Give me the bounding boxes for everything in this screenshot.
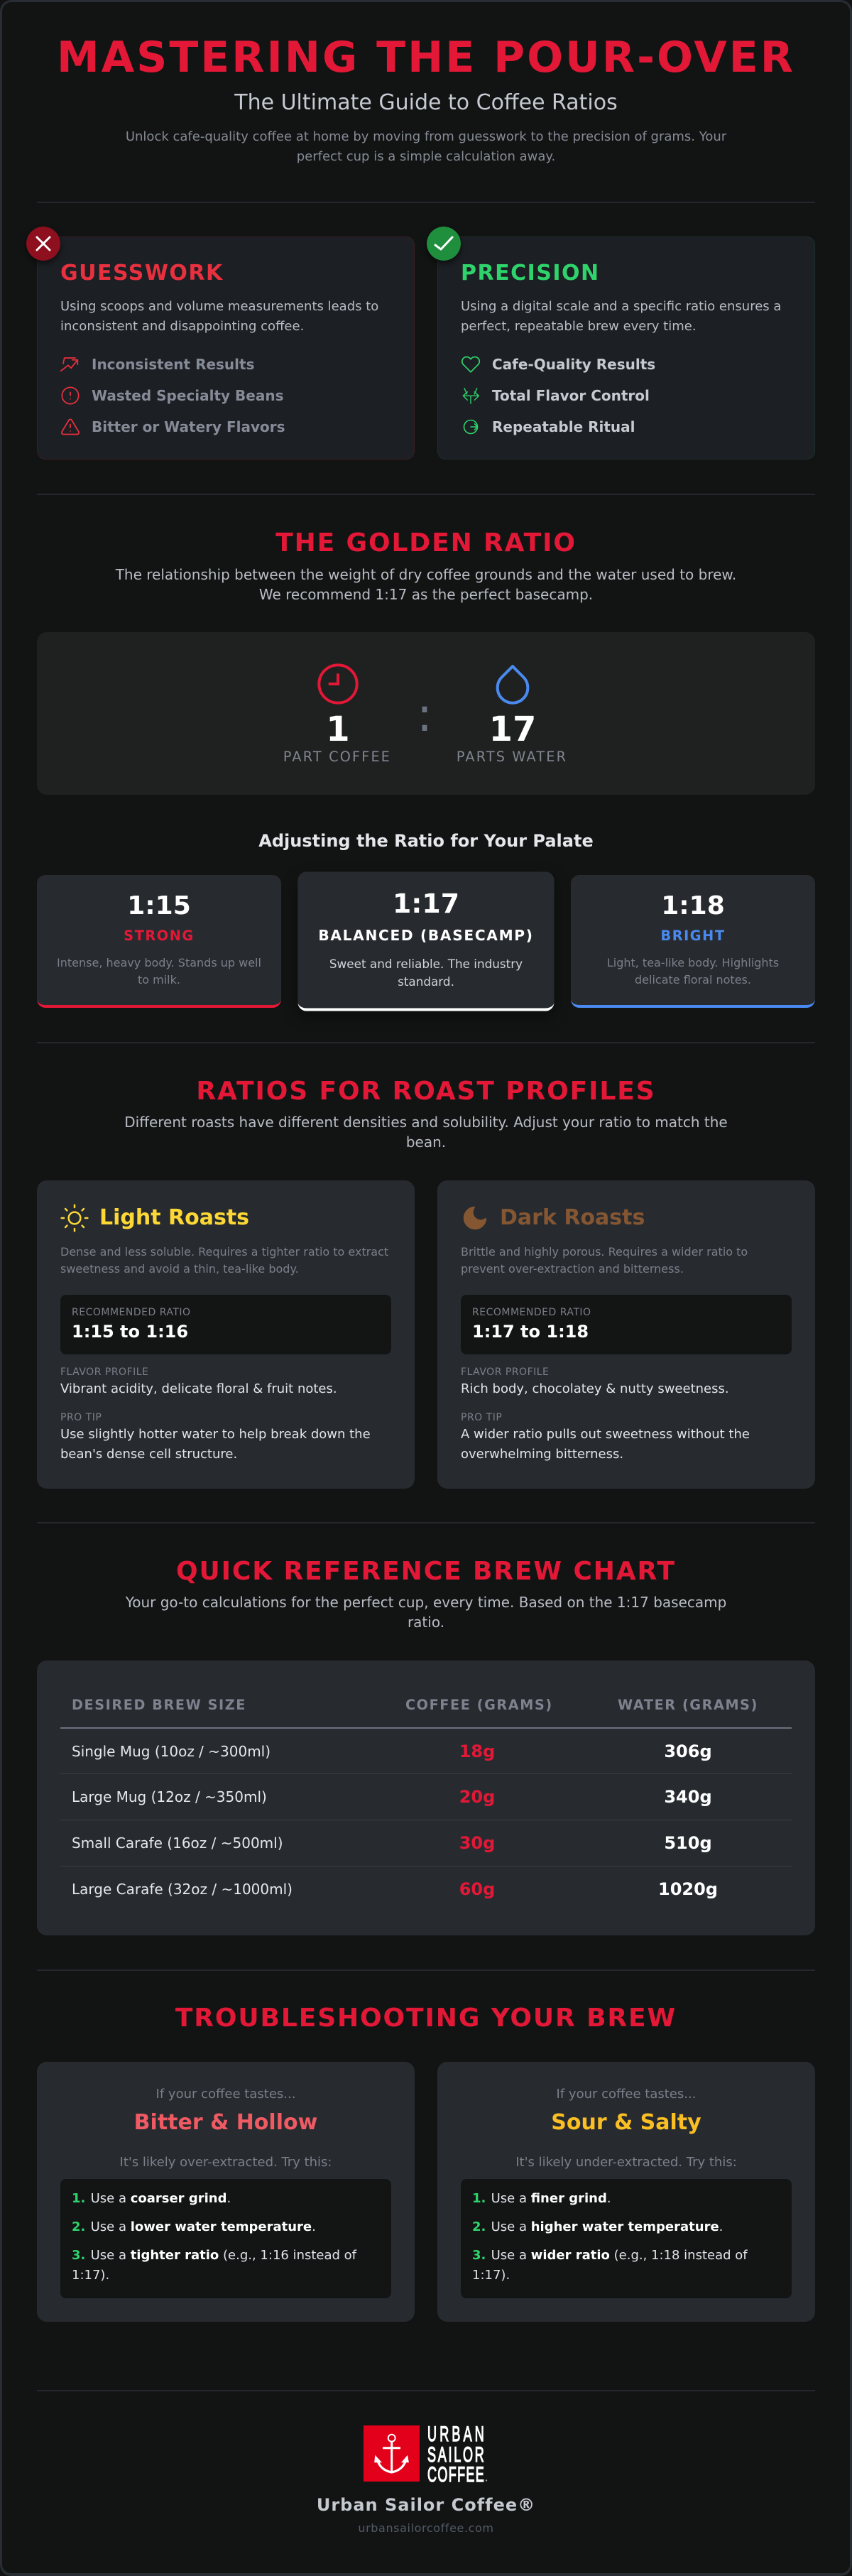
panel: brew table [37, 1661, 815, 1935]
row: large mug: 340g [664, 1787, 712, 1807]
callout: light ratio: RECOMMENDED RATIO [72, 1307, 191, 1318]
heading: precision: PRECISION [461, 261, 600, 286]
text: prompt: If your coffee tastes... [156, 2087, 295, 2102]
callout: dark ratio [461, 1295, 792, 1354]
panel: golden ratio [37, 632, 815, 795]
header [57, 33, 795, 164]
panel: precision [437, 237, 815, 460]
text: golden ratio intro: We recommend 1:17 as the perfect basecamp. [259, 586, 593, 603]
text: brew chart intro [125, 1594, 726, 1631]
list: fixes: 3. Use a tighter ratio (e.g., 1:16 instead of [72, 2248, 356, 2263]
text: brew chart intro: ratio. [408, 1614, 444, 1631]
text: tip [60, 1427, 371, 1462]
text: prompt: If your coffee tastes... [557, 2087, 696, 2102]
text: golden ratio intro [115, 566, 736, 603]
heading: adjusting the ratio: Adjusting the Ratio for Your Palate [258, 831, 594, 851]
text: dark description [461, 1245, 748, 1276]
card: 1:17 balanced: standard. [398, 974, 454, 989]
heading: dark roasts: Dark Roasts [500, 1205, 645, 1230]
heading: guesswork: GUESSWORK [60, 261, 224, 286]
logo: urban sailor coffee: SAILOR [427, 2444, 484, 2467]
text: roast intro: Different roasts have different densities and solubility. Adjust your ratio to match the [124, 1114, 728, 1131]
row: large carafe [72, 1879, 718, 1899]
icon: cross badge [26, 227, 60, 261]
panel: light roasts [37, 1180, 415, 1489]
list: fixes: 2. Use a lower water temperature. [72, 2219, 316, 2234]
row: large carafe: Large Carafe (32oz / ~1000ml) [72, 1881, 293, 1898]
number: water parts: 17 [489, 710, 536, 749]
list: fixes [461, 2179, 792, 2298]
icon: water drop [496, 665, 530, 705]
card: 1:15 strong [37, 875, 281, 1008]
row: single mug: Single Mug (10oz / ~300ml) [72, 1743, 271, 1760]
list: fixes [60, 2179, 391, 2298]
text: dark description: prevent over-extraction and bitterness. [461, 1262, 684, 1276]
table header [60, 1661, 792, 1729]
text: precision description [461, 299, 781, 334]
row: single mug [60, 1729, 792, 1774]
label: pro tip: PRO TIP [60, 1412, 102, 1423]
text: tip: A wider ratio pulls out sweetness without the [461, 1427, 750, 1442]
card: 1:17 balanced: 1:17 [393, 888, 459, 920]
website: urbansailorcoffee.com [358, 2521, 494, 2535]
list: fixes: 1:17). [72, 2268, 109, 2283]
row: small carafe: 510g [664, 1833, 712, 1853]
text: tip: bean's dense cell structure. [60, 1447, 237, 1462]
heading: sour and salty: Sour & Salty [551, 2110, 701, 2135]
intro text: perfect cup is a simple calculation away. [297, 149, 555, 164]
text: diagnosis: It's likely under-extracted. Try this: [515, 2155, 737, 2170]
heading: brew chart: QUICK REFERENCE BREW CHART [176, 1557, 676, 1586]
card: 1:18 bright: 1:18 [661, 891, 725, 920]
table header: COFFEE (GRAMS) [405, 1697, 553, 1713]
text: guesswork description: inconsistent and disappointing coffee. [60, 319, 304, 334]
card: 1:15 strong: to milk. [138, 973, 180, 987]
row: large mug: Large Mug (12oz / ~350ml) [72, 1788, 267, 1805]
callout: light ratio: 1:15 to 1:16 [72, 1322, 188, 1342]
table header: WATER (GRAMS) [618, 1697, 758, 1713]
list: fixes: 1:17). [472, 2268, 510, 2283]
heading: troubleshooting: TROUBLESHOOTING YOUR BREW [175, 2004, 677, 2033]
row: large mug [60, 1774, 792, 1820]
card: 1:15 strong: STRONG [124, 928, 195, 944]
item: bitter or watery: Bitter or Watery Flavors [92, 418, 285, 435]
text: light description: sweetness and avoid a thin, tea-like body. [60, 1262, 299, 1276]
card: 1:15 strong: Intense, heavy body. Stands up well [57, 956, 261, 969]
text: roast intro: bean. [406, 1134, 446, 1151]
panel: dark roasts [437, 1180, 815, 1489]
card: 1:18 bright: Light, tea-like body. Highlights [607, 956, 779, 969]
item: flavor control: Total Flavor Control [492, 387, 650, 404]
heading: bitter and hollow: Bitter & Hollow [134, 2110, 317, 2135]
card: 1:17 balanced [297, 871, 555, 1011]
list: fixes: 2. Use a higher water temperature. [472, 2219, 723, 2234]
text: light description [60, 1245, 388, 1276]
heading: roast profiles: RATIOS FOR ROAST PROFILES [196, 1077, 656, 1106]
intro text [126, 129, 727, 164]
row: small carafe: Small Carafe (16oz / ~500ml) [72, 1835, 283, 1852]
list: fixes: 1. Use a finer grind. [472, 2191, 611, 2206]
item: wasted beans: Wasted Specialty Beans [92, 387, 284, 404]
table header: DESIRED BREW SIZE [72, 1697, 246, 1713]
list: fixes: 3. Use a wider ratio (e.g., 1:18 instead of [472, 2248, 748, 2263]
number: coffee part: 1 [326, 710, 350, 749]
card: 1:18 bright: delicate floral notes. [635, 973, 751, 987]
logo: urban sailor coffee [364, 2425, 487, 2482]
text: diagnosis: It's likely over-extracted. Try this: [120, 2155, 332, 2170]
item: inconsistent results: Inconsistent Results [92, 356, 254, 373]
text: tip: overwhelming bitterness. [461, 1447, 623, 1462]
text: tip [461, 1427, 750, 1462]
label: flavor profile: FLAVOR PROFILE [60, 1366, 148, 1378]
text: guesswork description [60, 299, 378, 334]
label: part coffee: PART COFFEE [283, 749, 391, 765]
icon: moon [463, 1206, 487, 1230]
text: precision description: Using a digital scale and a specific ratio ensures a [461, 299, 781, 314]
brand name: Urban Sailor Coffee® [317, 2495, 535, 2515]
text: roast intro [124, 1114, 728, 1151]
text: golden ratio intro: The relationship between the weight of dry coffee grounds and the water used to brew. [116, 566, 736, 583]
icon: coffee clock [317, 663, 359, 705]
card: 1:17 balanced: Sweet and reliable. The industry [329, 957, 523, 971]
row: large carafe: 60g [459, 1879, 495, 1899]
row: large carafe: 1020g [658, 1879, 718, 1899]
subtitle: The Ultimate Guide to Coffee Ratios [234, 90, 618, 115]
heading: the golden ratio: THE GOLDEN RATIO [275, 528, 577, 558]
panel: bitter and hollow [37, 2062, 415, 2322]
card: 1:18 bright [571, 875, 815, 1008]
label: parts water: PARTS WATER [457, 749, 567, 765]
text: brew chart intro: Your go-to calculations for the perfect cup, every time. Based on the 1:17 basecamp [126, 1594, 726, 1611]
card: 1:18 bright: BRIGHT [660, 928, 726, 944]
row: large mug: 20g [459, 1787, 495, 1807]
footer [317, 2425, 535, 2535]
label: pro tip: PRO TIP [461, 1412, 502, 1423]
text: precision description: perfect, repeatable brew every time. [461, 319, 697, 334]
text: dark description: Brittle and highly porous. Requires a wider ratio to [461, 1245, 748, 1259]
card: 1:15 strong: 1:15 [127, 891, 191, 920]
list: fixes: 1. Use a coarser grind. [72, 2191, 231, 2206]
label: flavor profile: FLAVOR PROFILE [461, 1366, 549, 1378]
row: small carafe [60, 1820, 792, 1866]
text: tip: Use slightly hotter water to help break down the [60, 1427, 371, 1442]
callout: dark ratio: RECOMMENDED RATIO [472, 1307, 591, 1318]
row: small carafe: 30g [459, 1833, 495, 1853]
icon: sun [60, 1204, 89, 1232]
text: flavor: Rich body, chocolatey & nutty sweetness. [461, 1381, 729, 1396]
card: 1:17 balanced: BALANCED (BASECAMP) [318, 927, 534, 944]
title: MASTERING THE POUR-OVER [57, 33, 795, 82]
panel: guesswork [37, 237, 415, 460]
row: single mug: 306g [664, 1741, 712, 1761]
intro text: Unlock cafe-quality coffee at home by moving from guesswork to the precision of grams. Your [126, 129, 726, 144]
text: guesswork description: Using scoops and volume measurements leads to [60, 299, 378, 314]
colon: : [417, 688, 432, 742]
panel: sour and salty [437, 2062, 815, 2322]
callout: dark ratio: 1:17 to 1:18 [472, 1322, 589, 1342]
icon: check badge [427, 227, 461, 261]
row: single mug: 18g [459, 1741, 495, 1761]
heading: light roasts: Light Roasts [99, 1205, 249, 1230]
text: flavor: Vibrant acidity, delicate floral & fruit notes. [60, 1381, 337, 1396]
item: cafe quality: Cafe-Quality Results [492, 356, 655, 373]
callout: light ratio [60, 1295, 391, 1354]
item: repeatable ritual: Repeatable Ritual [492, 418, 635, 435]
text: light description: Dense and less soluble. Requires a tighter ratio to extract [60, 1245, 388, 1259]
